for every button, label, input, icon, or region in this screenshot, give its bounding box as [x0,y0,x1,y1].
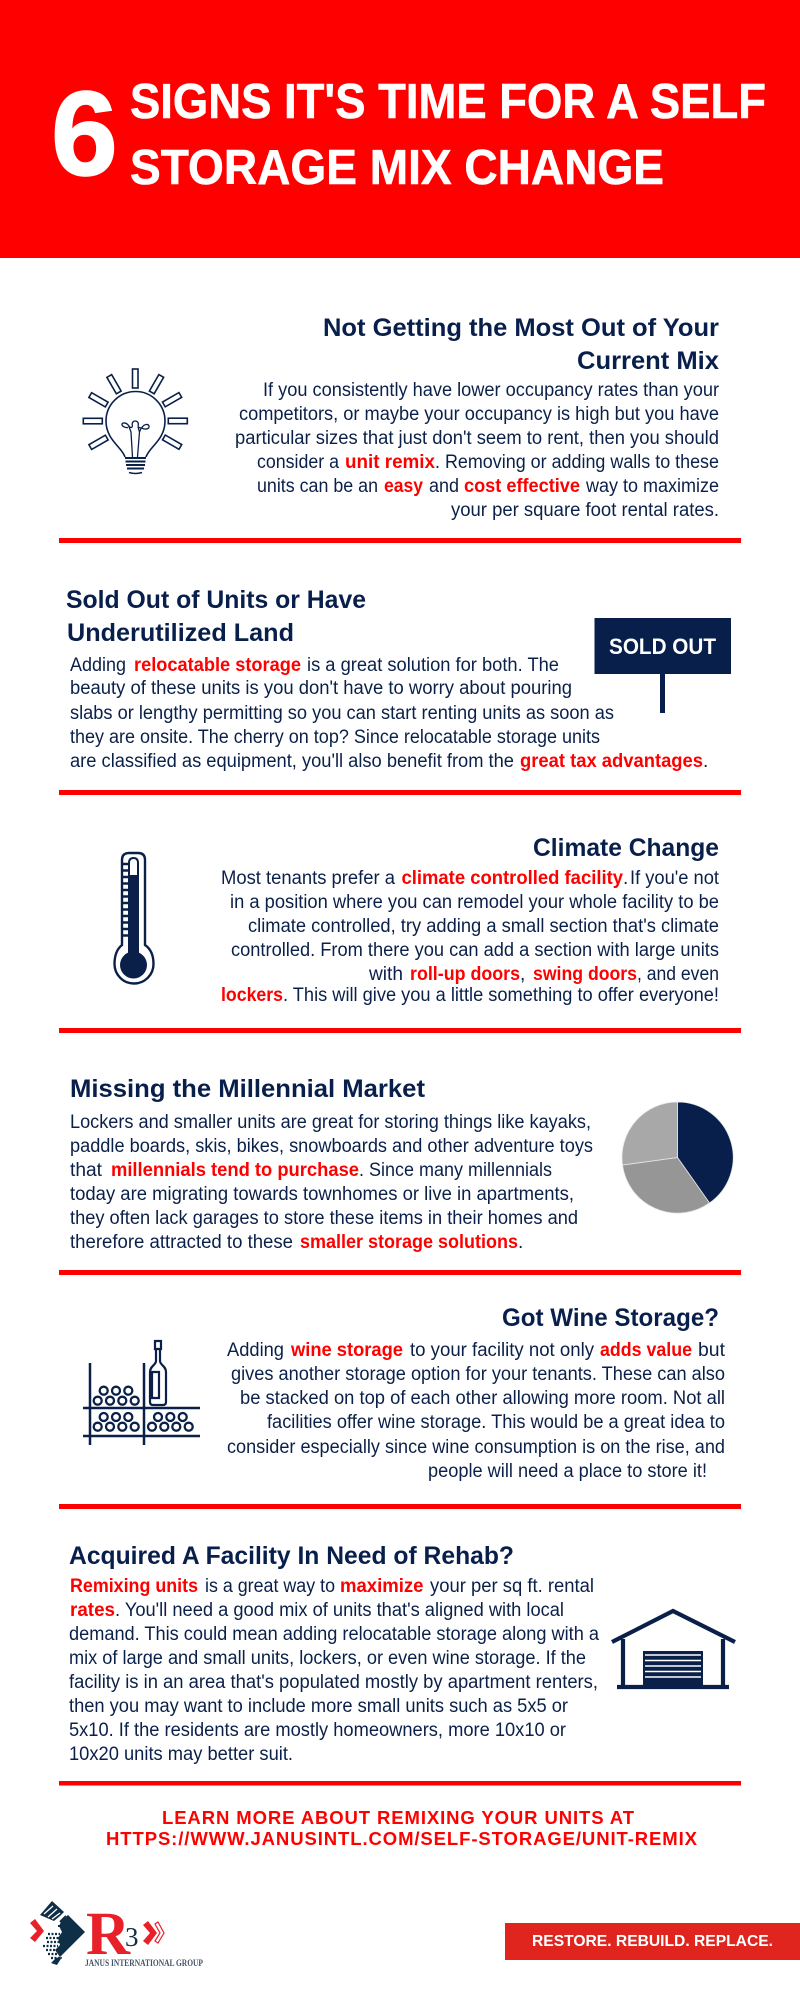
body text: consider a [257,452,339,473]
body text: particular sizes that just don't seem to rent, then you should [235,428,719,449]
body text: units can be an [257,476,378,497]
body text: gives another storage option for your tenants. These can also [231,1364,725,1385]
heading: Underutilized Land [67,619,294,647]
title: STORAGE MIX CHANGE [130,141,664,195]
body text: . [623,868,628,889]
body text [235,380,720,521]
tagline banner [505,1923,800,1960]
body text: mix of large and small units, lockers, or even wine storage. If the [69,1648,586,1669]
heading: Got Wine Storage? [502,1304,719,1332]
panel: not getting the most out of your current mix [83,314,720,521]
logo R3 lettering: R [86,1901,131,1968]
body text: they often lack garages to store these items in their homes and [70,1208,578,1229]
body text: people will need a place to store it! [428,1461,707,1482]
icon: garage [612,1611,735,1687]
body text: cost effective [464,476,580,497]
heading: Not Getting the Most Out of Your [323,314,719,342]
body text: competitors, or maybe your occupancy is high but you have [239,404,719,425]
body text: paddle boards, skis, bikes, snowboards and other adventure toys [70,1136,593,1157]
body text: climate controlled facility [402,868,623,889]
body text: lockers [221,985,283,1006]
heading: Acquired A Facility In Need of Rehab? [69,1542,514,1570]
body text: maximize [340,1576,424,1597]
header banner [0,0,800,258]
body text: beauty of these units is you don't have to worry about pouring [70,678,572,699]
body text: great tax advantages [520,751,703,772]
body text: demand. This could mean adding relocatable storage along with a [69,1624,599,1645]
call to action: LEARN MORE ABOUT REMIXING YOUR UNITS AT [162,1807,635,1828]
big number 6: 6 [51,67,118,201]
body text: unit remix [345,452,435,473]
body text [70,1112,593,1253]
body text: facility is in an area that's populated mostly by apartment renters, [69,1672,598,1693]
body text: adds value [600,1340,692,1361]
body text: is a great solution for both. The [307,655,559,676]
panel: sold out of units or underutilized land [66,586,731,772]
body text: consider especially since wine consumption is on the rise, and [227,1437,725,1458]
body text: to your facility not only [410,1340,594,1361]
panel: missing the millennial market [70,1075,733,1253]
body text: with [368,964,403,985]
body text: . You'll need a good mix of units that's aligned with local [115,1600,564,1621]
title [130,75,766,195]
logo diamond emblem [30,1901,85,1965]
body text: , [520,964,525,985]
body text: Most tenants prefer a [221,868,395,889]
heading: Missing the Millennial Market [70,1075,426,1103]
body text: relocatable storage [134,655,301,676]
body text: your per square foot rental rates. [451,500,719,521]
panel: got wine storage [83,1304,726,1482]
body text: but [698,1340,726,1361]
body text: Adding [227,1340,284,1361]
body text [69,1576,599,1765]
body text: . This will give you a little something to offer everyone! [283,985,719,1006]
logo: R3 Janus International Group [30,1901,203,1969]
body text: today are migrating towards townhomes or live in apartments, [70,1184,574,1205]
body text: . [703,751,708,772]
heading [66,586,366,647]
panel: acquired a facility in need of rehab [69,1542,735,1765]
call to action [106,1807,698,1849]
body text: . Removing or adding walls to these [435,452,719,473]
body text: are classified as equipment, you'll also benefit from the [70,751,514,772]
body text: Remixing units [70,1576,198,1597]
body text: smaller storage solutions [300,1232,518,1253]
body text: therefore attracted to these [70,1232,293,1253]
panel: climate change [114,834,720,1006]
body text [70,655,708,772]
call to action: HTTPS://WWW.JANUSINTL.COM/SELF-STORAGE/UNIT-REMIX [106,1828,698,1849]
body text: wine storage [290,1340,403,1361]
tagline banner: RESTORE. REBUILD. REPLACE. [532,1933,773,1950]
icon: light bulb [83,369,187,474]
body text: swing doors [533,964,637,985]
body text: If you'e not [630,868,720,889]
icon: wine rack [83,1341,200,1445]
body text: Adding [70,655,126,676]
body text: millennials tend to purchase [111,1160,359,1181]
body text: climate controlled, try adding a small section that's climate [248,916,719,937]
body text: way to maximize [585,476,719,497]
icon: thermometer [114,853,154,984]
body text: , and even [637,964,719,985]
body text: . [518,1232,523,1253]
body text: roll-up doors [410,964,520,985]
logo company name: JANUS INTERNATIONAL GROUP [85,1959,203,1969]
body text [221,868,720,1006]
body text: your per sq ft. rental [430,1576,594,1597]
icon: sold out sign [594,618,731,713]
pie chart [622,1102,733,1213]
body text: be stacked on top of each other allowing more room. Not all [240,1388,725,1409]
body text: is a great way to [205,1576,335,1597]
heading: Current Mix [577,347,719,375]
body text: easy [384,476,423,497]
body text: in a position where you can remodel your whole facility to be [230,892,719,913]
body text: slabs or lengthy permitting so you can start renting units as soon as [70,703,614,724]
logo: R3 Janus International Group: 3 [125,1922,138,1952]
body text: rates [70,1600,115,1621]
body text: then you may want to include more small units such as 5x5 or [69,1696,569,1717]
body text: If you consistently have lower occupancy rates than your [263,380,720,401]
body text: Lockers and smaller units are great for storing things like kayaks, [70,1112,591,1133]
logo chevrons [143,1921,164,1945]
heading: Sold Out of Units or Have [66,586,366,614]
heading: Climate Change [533,834,719,862]
icon: sold out sign: SOLD OUT [609,634,717,659]
body text [227,1340,726,1482]
body text: facilities offer wine storage. This would be a great idea to [267,1412,725,1433]
body text: 5x10. If the residents are mostly homeowners, more 10x10 or [69,1720,567,1741]
heading [323,314,719,375]
body text: 10x20 units may better suit. [69,1744,293,1765]
body text: controlled. From there you can add a section with large units [231,940,719,961]
body text: . Since many millennials [359,1160,552,1181]
body text: that [70,1160,103,1181]
title: SIGNS IT'S TIME FOR A SELF [130,75,766,129]
body text: they are onsite. The cherry on top? Since relocatable storage units [70,727,600,748]
body text: and [429,476,459,497]
